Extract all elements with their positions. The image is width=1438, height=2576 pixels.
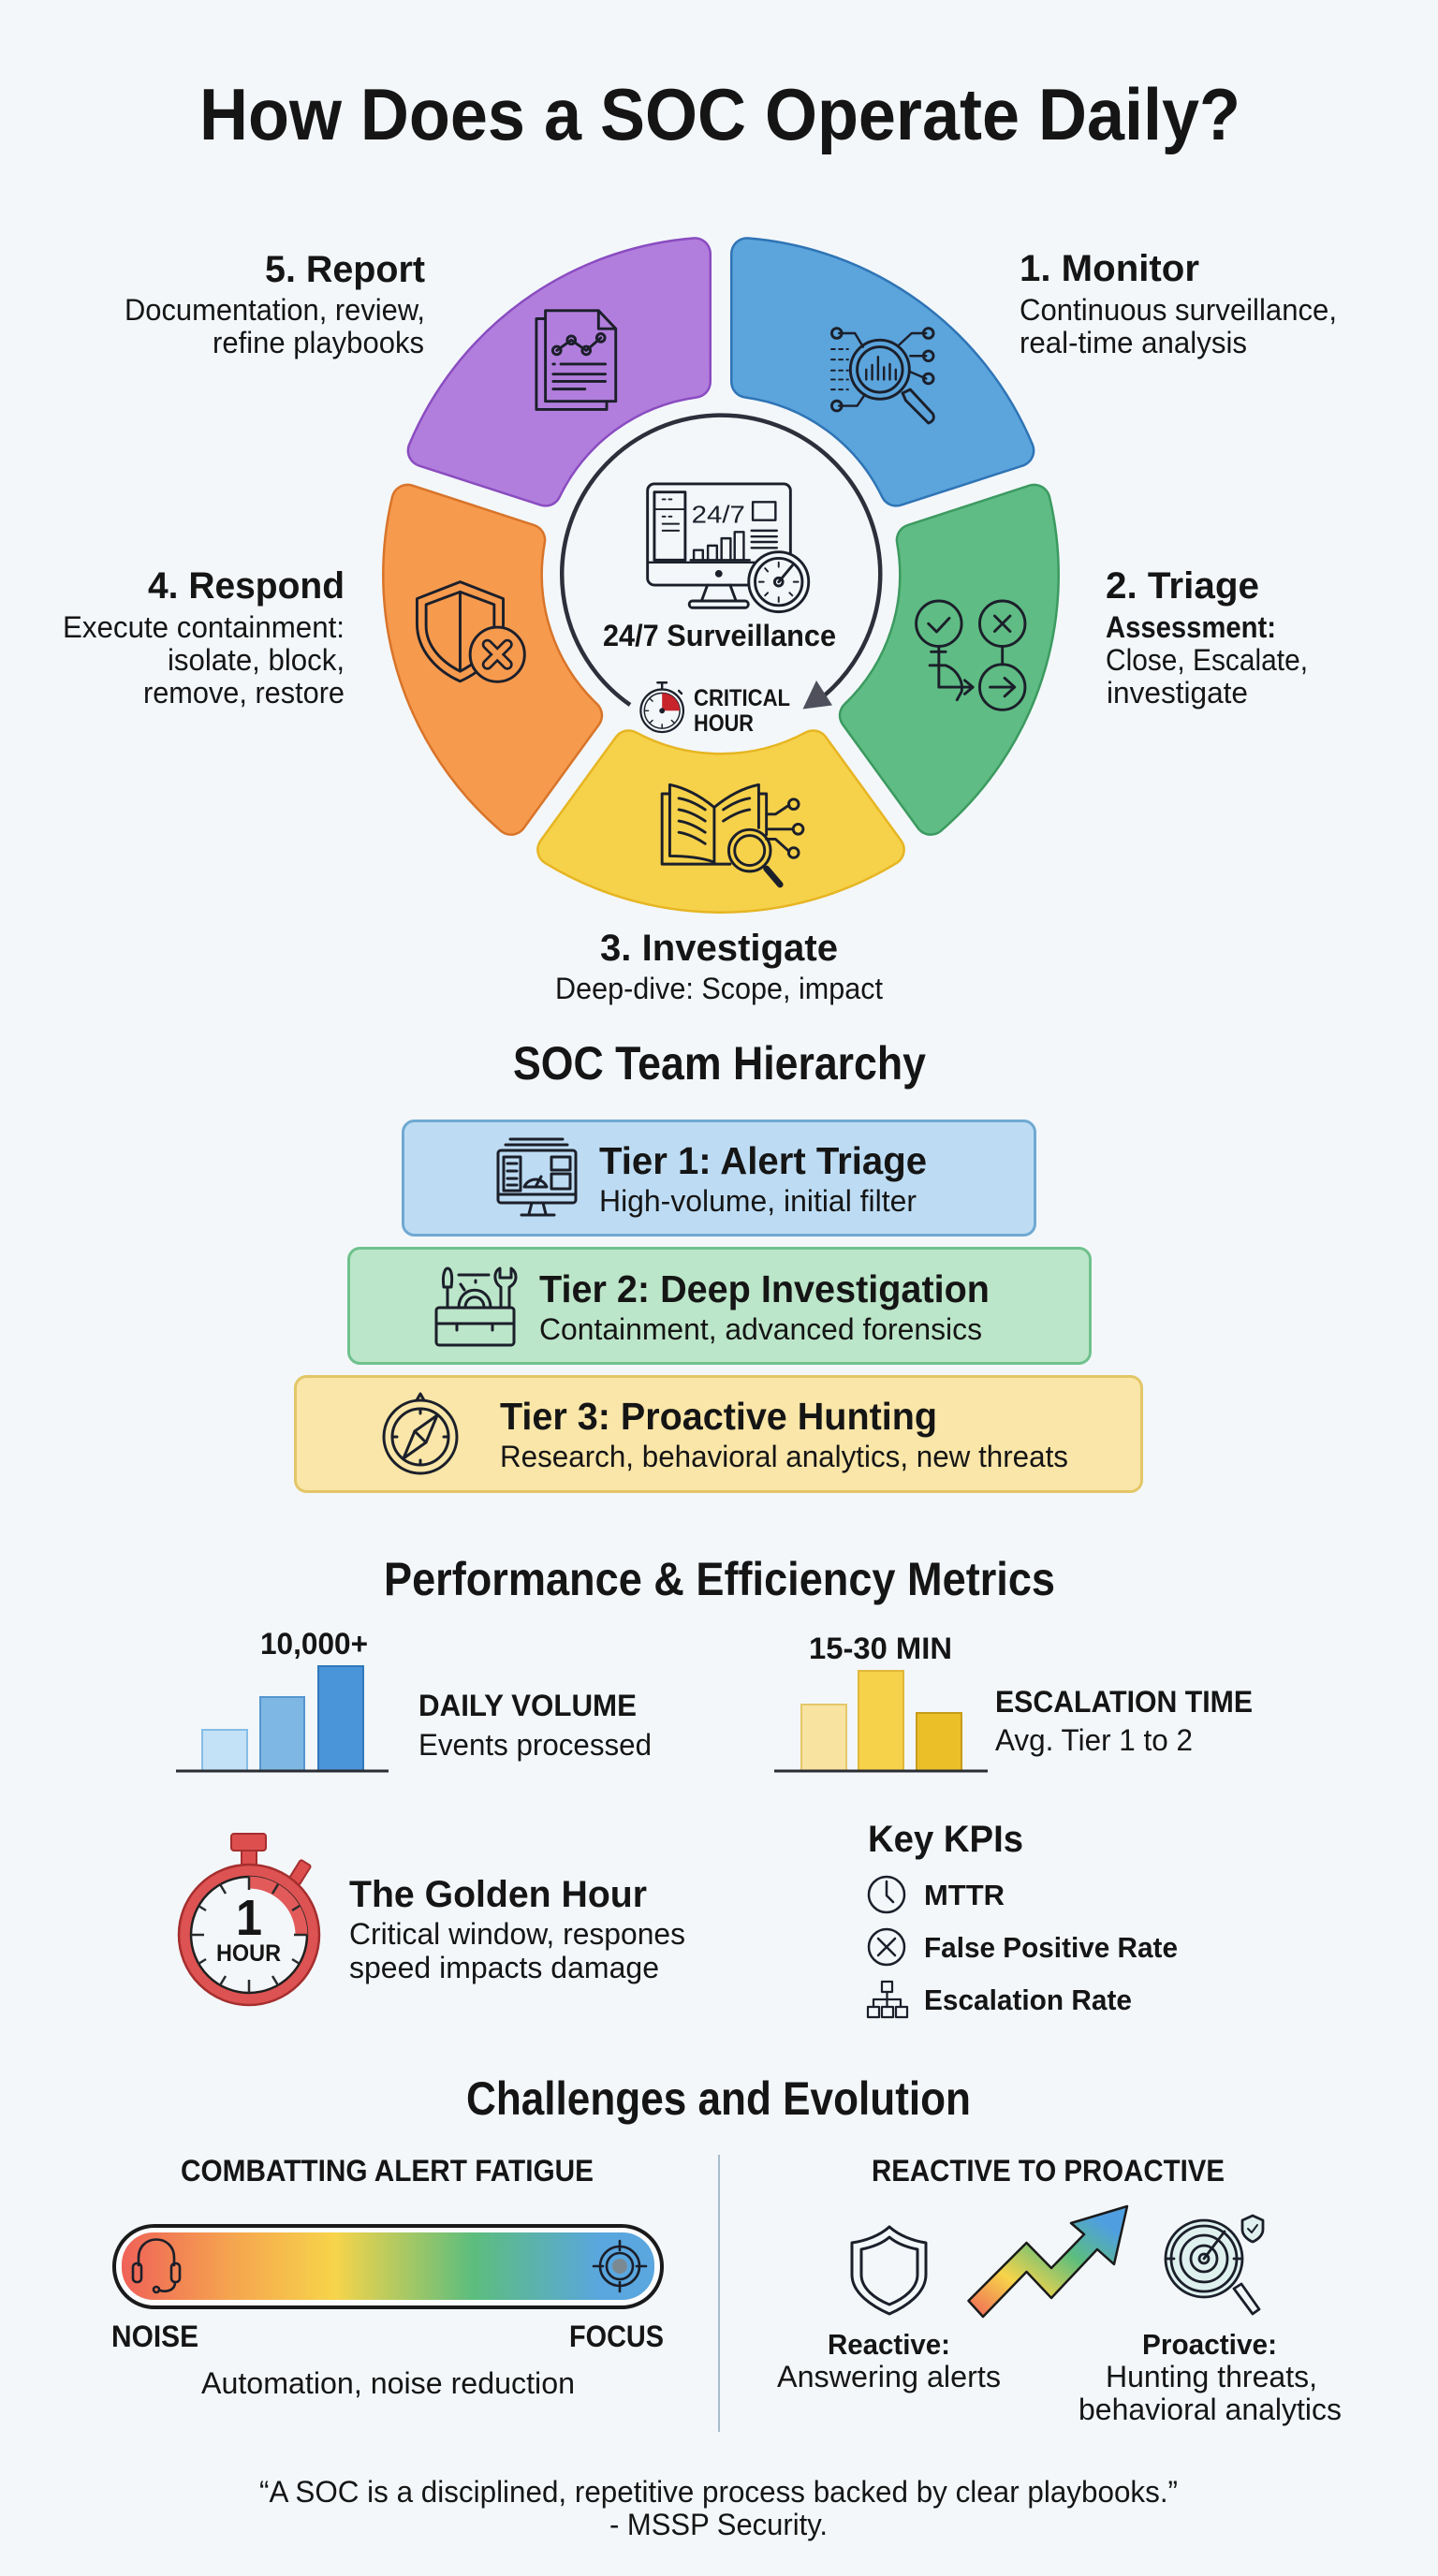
metric: daily volume bbox=[176, 1627, 652, 1771]
heading: SOC Team Hierarchy: SOC Team Hierarchy bbox=[513, 1037, 926, 1090]
tier 1 text bbox=[599, 1139, 927, 1218]
tier 2 text bbox=[539, 1267, 990, 1346]
reactive text: Answering alerts bbox=[777, 2360, 1001, 2393]
icon: reactive shield bbox=[852, 2227, 926, 2314]
tier 3 text bbox=[500, 1395, 1068, 1473]
subheading: reactive to proactive: REACTIVE TO PROACTIVE bbox=[872, 2154, 1225, 2188]
step label: 1. Monitor: Continuous surveillance, bbox=[1020, 293, 1337, 327]
tier 1 text: Tier 1: Alert Triage bbox=[599, 1139, 927, 1182]
step label: 1. Monitor bbox=[1020, 248, 1337, 359]
icon: monitor with magnifier bbox=[831, 329, 933, 423]
proactive text: Hunting threats, bbox=[1106, 2360, 1317, 2393]
icon: proactive radar bbox=[1166, 2216, 1263, 2314]
metric: daily volume: DAILY VOLUME bbox=[418, 1689, 637, 1722]
subheading: combatting alert fatigue: COMBATTING ALERT FATIGUE bbox=[181, 2154, 594, 2188]
icon: shield with cross bbox=[417, 582, 524, 681]
golden hour text: Critical window, respones bbox=[349, 1917, 685, 1951]
segment: report (purple) bbox=[396, 216, 756, 534]
segment: monitor (blue) bbox=[686, 216, 1046, 534]
step label: 4. Respond: 4. Respond bbox=[148, 565, 345, 607]
gradient bar: noise to focus bbox=[114, 2226, 662, 2307]
reactive text: Reactive: bbox=[828, 2328, 950, 2361]
panel: SOC process cycle bbox=[363, 216, 1078, 897]
icon: open book with magnifier bbox=[662, 784, 803, 885]
panel: tier 1 bbox=[403, 1121, 1035, 1236]
quote bbox=[259, 2475, 1178, 2541]
tier 3 text: Tier 3: Proactive Hunting bbox=[500, 1395, 937, 1438]
icon: target bbox=[594, 2241, 646, 2291]
panel: combatting alert fatigue bbox=[111, 2154, 664, 2400]
icon: 24/7 monitor with gauge bbox=[648, 484, 809, 612]
center label: critical hour: HOUR bbox=[694, 710, 754, 737]
icon: critical hour stopwatch bbox=[640, 682, 683, 732]
step label: 2. Triage bbox=[1106, 565, 1308, 710]
quote: - MSSP Security. bbox=[609, 2508, 828, 2541]
step label: 1. Monitor: 1. Monitor bbox=[1020, 248, 1199, 289]
kpi: MTTR bbox=[869, 1877, 1005, 1912]
icon: triage flow bbox=[917, 601, 1025, 710]
icon: 24/7 monitor with gauge: 24/7 bbox=[692, 501, 745, 529]
bar chart: escalation time bbox=[774, 1671, 988, 1771]
quote: “A SOC is a disciplined, repetitive process backed by clear playbooks.” bbox=[259, 2475, 1178, 2509]
icon: golden hour stopwatch bbox=[179, 1834, 319, 2005]
center label: 24/7 Surveillance: 24/7 Surveillance bbox=[603, 619, 836, 652]
tier 1 text: High-volume, initial filter bbox=[599, 1184, 917, 1218]
panel: reactive to proactive bbox=[777, 2154, 1342, 2426]
heading: challenges and evolution: Challenges and Evolution bbox=[466, 2072, 971, 2125]
center ring arrow bbox=[562, 416, 880, 710]
tier 3 text: Research, behavioral analytics, new threats bbox=[500, 1440, 1068, 1473]
step label: 4. Respond: Execute containment: bbox=[63, 610, 345, 644]
center label: critical hour bbox=[694, 685, 790, 737]
step label: 2. Triage: Close, Escalate, bbox=[1106, 643, 1308, 677]
panel: the golden hour bbox=[179, 1834, 685, 2005]
step label: 3. Investigate bbox=[555, 928, 883, 1005]
center label: critical hour: CRITICAL bbox=[694, 685, 790, 711]
icon: report document bbox=[536, 311, 616, 409]
icon: golden hour stopwatch: 1 bbox=[236, 1890, 262, 1946]
segment: investigate (yellow) bbox=[553, 746, 888, 897]
icon: headset bbox=[133, 2239, 180, 2292]
step label: 3. Investigate: Deep-dive: Scope, impact bbox=[555, 972, 883, 1005]
metric: escalation time: 15-30 MIN bbox=[809, 1632, 952, 1665]
step label: 3. Investigate: 3. Investigate bbox=[600, 928, 838, 969]
step label: 5. Report: Documentation, review, bbox=[125, 293, 425, 327]
golden hour text bbox=[349, 1874, 685, 1984]
heading: key KPIs: Key KPIs bbox=[868, 1819, 1023, 1860]
proactive text bbox=[1078, 2328, 1342, 2426]
step label: 2. Triage: Assessment: bbox=[1106, 610, 1276, 644]
segment: respond (orange) bbox=[363, 468, 609, 833]
step label: 4. Respond: isolate, block, bbox=[168, 643, 345, 677]
bar chart: daily volume bbox=[176, 1666, 389, 1771]
heading: performance metrics: Performance & Efficiency Metrics bbox=[384, 1553, 1055, 1605]
icon: golden hour stopwatch: HOUR bbox=[216, 1940, 281, 1967]
metric: escalation time: ESCALATION TIME bbox=[995, 1685, 1253, 1719]
step label: 4. Respond bbox=[63, 565, 345, 710]
proactive text: Proactive: bbox=[1142, 2328, 1277, 2361]
step label: 5. Report: refine playbooks bbox=[213, 326, 424, 359]
label: focus: FOCUS bbox=[569, 2320, 664, 2353]
caption: automation: Automation, noise reduction bbox=[201, 2366, 575, 2400]
segment: triage (green) bbox=[832, 468, 1078, 833]
panel: key KPIs bbox=[868, 1819, 1178, 2017]
tier 2 text: Containment, advanced forensics bbox=[539, 1312, 982, 1346]
icon: toolbox bbox=[436, 1268, 516, 1345]
step label: 5. Report bbox=[125, 249, 425, 359]
step label: 1. Monitor: real-time analysis bbox=[1020, 326, 1247, 359]
metric: escalation time bbox=[774, 1632, 1253, 1771]
metric: daily volume: 10,000+ bbox=[260, 1627, 368, 1661]
step label: 2. Triage: investigate bbox=[1107, 676, 1248, 710]
icon: dashboard monitor bbox=[498, 1139, 576, 1215]
metric: daily volume: Events processed bbox=[418, 1728, 652, 1762]
kpi: false positive rate: False Positive Rate bbox=[924, 1931, 1178, 1964]
step label: 2. Triage: 2. Triage bbox=[1106, 565, 1259, 607]
icons drawn in ring coordinates bbox=[417, 311, 1025, 885]
kpi: escalation rate: Escalation Rate bbox=[924, 1983, 1132, 2016]
tier 2 text: Tier 2: Deep Investigation bbox=[539, 1267, 990, 1310]
step label: 4. Respond: remove, restore bbox=[143, 676, 345, 710]
reactive text bbox=[777, 2328, 1001, 2393]
kpi: MTTR: MTTR bbox=[924, 1879, 1005, 1911]
golden hour text: The Golden Hour bbox=[349, 1874, 647, 1915]
metric: escalation time: Avg. Tier 1 to 2 bbox=[995, 1723, 1193, 1757]
title: How Does a SOC Operate Daily? bbox=[199, 73, 1240, 155]
panel: tier 2 bbox=[348, 1249, 1090, 1363]
golden hour text: speed impacts damage bbox=[349, 1951, 659, 1984]
arrow: reactive to proactive bbox=[968, 2206, 1127, 2317]
label: noise: NOISE bbox=[111, 2320, 198, 2353]
step label: 5. Report: 5. Report bbox=[265, 249, 425, 290]
panel: tier 3 bbox=[296, 1376, 1142, 1492]
icon: compass bbox=[384, 1394, 457, 1473]
proactive text: behavioral analytics bbox=[1078, 2393, 1342, 2426]
